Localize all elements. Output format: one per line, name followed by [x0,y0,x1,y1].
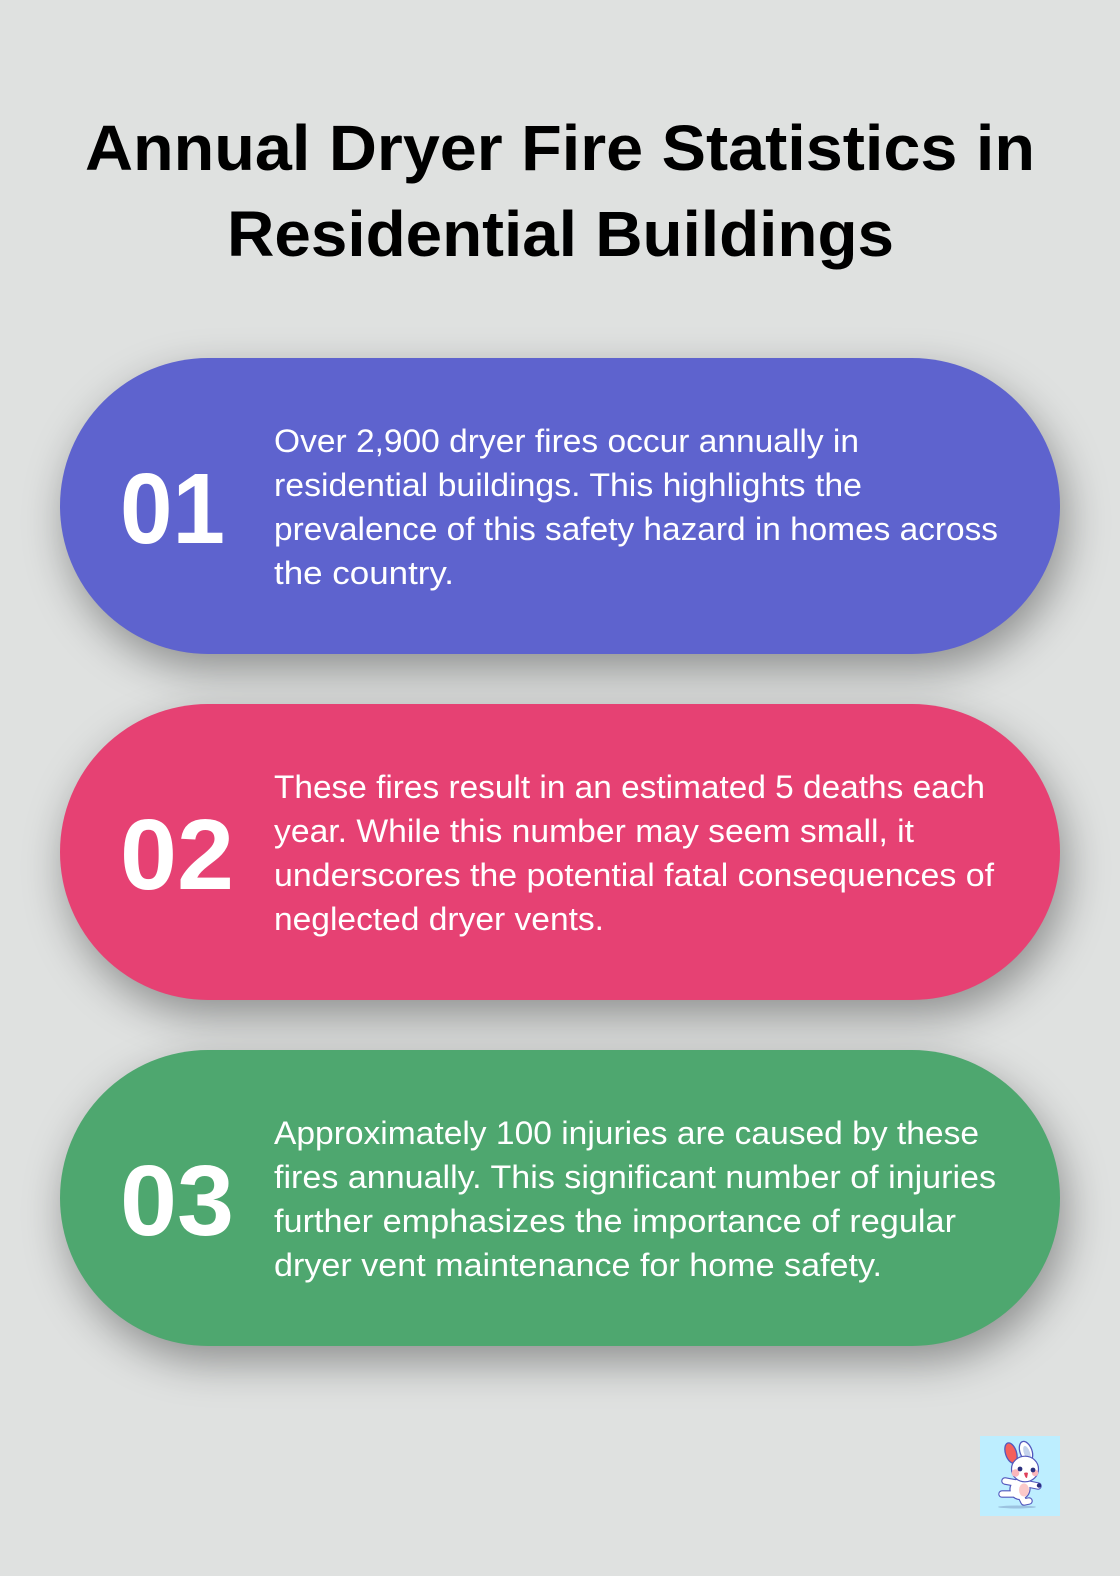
step number 02: 02 [120,799,234,911]
text block: deaths per year: These fires result in an estimated 5 deaths each [274,769,985,805]
text block: dryer fires per year: the country. [274,555,454,591]
title: Residential Buildings [227,198,894,270]
text block: dryer fires per year: Over 2,900 dryer fires occur annually in [274,423,859,459]
text block: injuries per year [274,1115,996,1283]
text block: deaths per year: underscores the potential fatal consequences of [274,857,994,893]
text block: deaths per year [274,769,994,937]
title: Annual Dryer Fire Statistics in [85,112,1035,184]
text block: deaths per year: year. While this number may seem small, it [274,813,914,849]
step number 03: 03 [120,1145,234,1257]
panel: step 03 [60,1050,1060,1346]
text block: injuries per year: further emphasizes the importance of regular [274,1203,956,1239]
text block: injuries per year: dryer vent maintenance for home safety. [274,1247,882,1283]
panel: step 02 [60,704,1060,1000]
step number 01: 01 [120,453,225,565]
text block: deaths per year: neglected dryer vents. [274,901,604,937]
panel: step 01 [60,358,1060,654]
title [85,112,1035,270]
text block: injuries per year: fires annually. This significant number of injuries [274,1159,996,1195]
text block: dryer fires per year: prevalence of this safety hazard in homes across [274,511,998,547]
icon: running rabbit logo [980,1436,1060,1516]
text block: injuries per year: Approximately 100 injuries are caused by these [274,1115,979,1151]
text block: dryer fires per year: residential buildings. This highlights the [274,467,862,503]
text block: dryer fires per year [274,423,998,591]
